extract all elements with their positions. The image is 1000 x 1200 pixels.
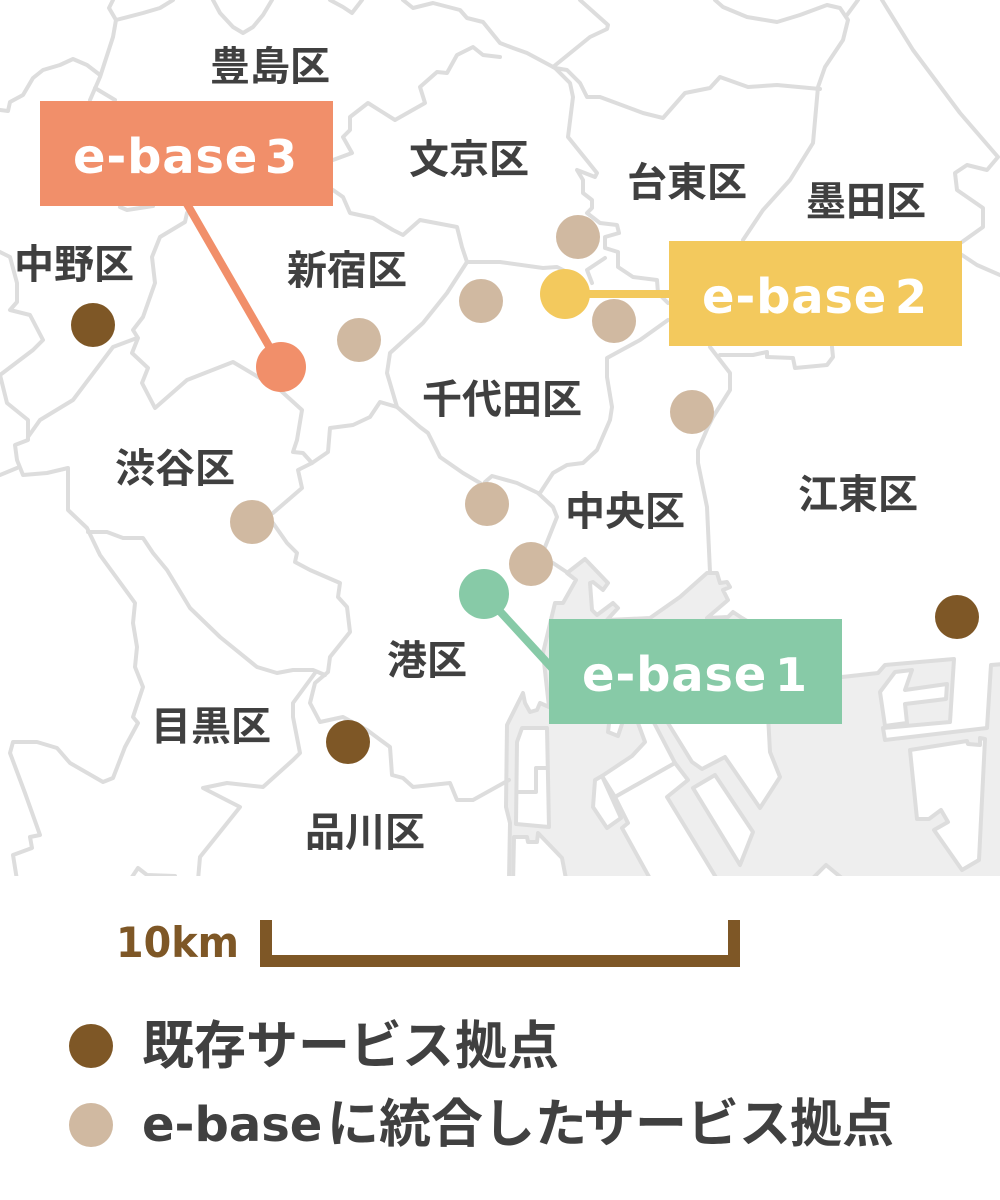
label: 品川区: 品川区 <box>305 811 425 855</box>
reclaimed land pockets <box>513 670 985 884</box>
label: 豊島区: 豊島区 <box>210 45 330 89</box>
label: 目黒区: 目黒区 <box>151 705 271 749</box>
district names <box>14 45 926 855</box>
callout: e-base3: 3 <box>265 130 298 184</box>
existing service locations <box>71 303 979 764</box>
legend: location merged into e-base <box>69 1096 894 1154</box>
callout: e-base1: e-base <box>582 647 767 703</box>
label: 台東区: 台東区 <box>627 161 747 205</box>
label: 新宿区: 新宿区 <box>287 249 407 293</box>
callout: e-base1: 1 <box>775 648 808 702</box>
legend: location merged into e-base: 拠点 <box>790 1096 894 1154</box>
label: 中野区: 中野区 <box>14 243 134 287</box>
legend: existing service location: 拠点 <box>455 1018 559 1076</box>
merged service locations <box>230 215 714 586</box>
legend: location merged into e-base: e-base <box>142 1097 322 1153</box>
callout: e-base2: 2 <box>895 270 928 324</box>
label: 文京区: 文京区 <box>409 138 529 182</box>
label: 渋谷区: 渋谷区 <box>115 447 235 491</box>
scale bar <box>260 920 740 967</box>
legend: location merged into e-base: サービス <box>583 1096 791 1154</box>
bay water area <box>506 559 1000 884</box>
callout: e-base3 <box>40 101 333 392</box>
legend: existing service location: 既存サービス <box>142 1018 454 1076</box>
callout: e-base2: e-base <box>702 269 887 325</box>
label: 中央区: 中央区 <box>565 490 685 534</box>
label: 江東区: 江東区 <box>798 473 918 517</box>
legend: existing service location <box>69 1018 559 1076</box>
callout: e-base2 <box>540 241 962 346</box>
label: 港区: 港区 <box>387 639 467 683</box>
label: 千代田区: 千代田区 <box>422 378 582 422</box>
scale label: 10km: 10km <box>116 918 239 967</box>
callout: e-base3: e-base <box>73 129 258 185</box>
legend: location merged into e-base: に統合した <box>327 1096 587 1154</box>
map: ward boundaries and bay <box>0 0 1000 884</box>
callout: e-base1 <box>459 569 842 724</box>
ward boundary lines <box>0 0 1000 880</box>
label: 墨田区: 墨田区 <box>806 180 926 224</box>
